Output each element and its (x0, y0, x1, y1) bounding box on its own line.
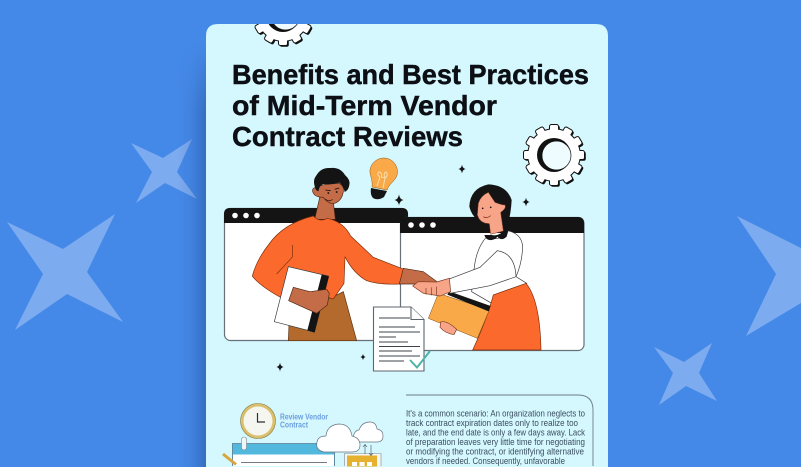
title: Benefits and Best Practices (232, 59, 589, 90)
server box with arrows (344, 444, 381, 466)
intro paragraph: late, and the end date is only a few days away. Lack (406, 428, 586, 438)
woman lower hand (440, 322, 457, 335)
background decorative stars (7, 139, 801, 405)
icon: clock (240, 404, 276, 438)
woman figure (428, 231, 541, 350)
label: review vendor contract (280, 412, 328, 430)
contract calendar illustration (223, 437, 334, 466)
woman orange skirt (473, 283, 541, 350)
intro paragraph: track contract expiration dates only to realize too (406, 418, 578, 428)
card shadow (187, 56, 206, 467)
intro paragraph: or modifying the contract, or identifying alternative (406, 446, 584, 456)
document icon with check mark (374, 307, 430, 371)
man figure (252, 216, 404, 341)
handshake (399, 268, 451, 296)
folder (428, 291, 491, 338)
label: review vendor contract: Contract (280, 420, 308, 430)
intro paragraph (406, 408, 586, 466)
man hand (289, 287, 329, 313)
icon: clouds (317, 422, 383, 452)
woman collar (484, 231, 508, 240)
clipboard (274, 267, 329, 333)
card panel (206, 24, 608, 467)
intro paragraph: It's a common scenario: An organization neglects to (406, 408, 585, 418)
right browser window (400, 217, 584, 350)
man trousers (288, 292, 357, 341)
sparkles (230, 165, 563, 371)
woman head (469, 184, 512, 234)
title: of Mid-Term Vendor (232, 90, 497, 121)
icon: main gear (524, 124, 586, 187)
intro text panel (406, 395, 593, 466)
label: review vendor contract: Review Vendor (280, 412, 328, 422)
icon: top gear (254, 24, 312, 47)
title: Contract Reviews (232, 121, 463, 152)
woman sleeve (448, 251, 516, 293)
icon: light bulb (370, 158, 398, 199)
woman blouse body (472, 231, 527, 303)
left browser window (224, 208, 408, 340)
man head (313, 168, 350, 219)
intro paragraph: of preparation leaves very little time for negotiating (406, 437, 585, 447)
intro paragraph: vendors if needed. Consequently, unfavorable (406, 456, 565, 466)
title (232, 59, 589, 152)
man orange sweater (252, 216, 404, 301)
